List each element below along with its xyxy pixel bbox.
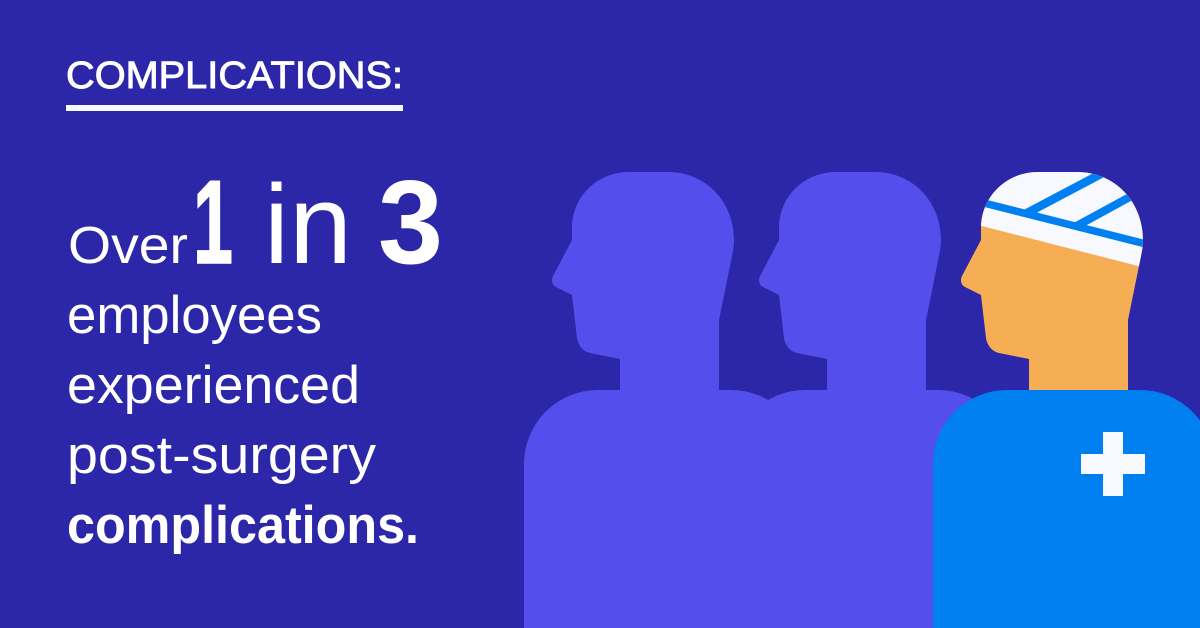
figure: injured employee [933,165,1200,628]
statistic text block: complications. [67,496,419,555]
statistic text block: 1 [193,156,233,289]
figure: second silhouette [731,172,1012,628]
statistic text block: Over [68,217,188,275]
statistic text block: 3 [378,156,443,289]
heading: complications: COMPLICATIONS: [66,55,403,97]
statistic text block: in [264,162,352,287]
statistic text block: experienced [67,356,360,415]
figure: first silhouette [524,172,805,628]
bandage [981,172,1143,266]
statistic text block [67,156,443,555]
statistic text block: employees [67,286,322,345]
torso [933,390,1200,628]
statistic text block: post-surgery [67,426,377,485]
icon: medical cross [1081,432,1145,496]
head [961,172,1143,395]
